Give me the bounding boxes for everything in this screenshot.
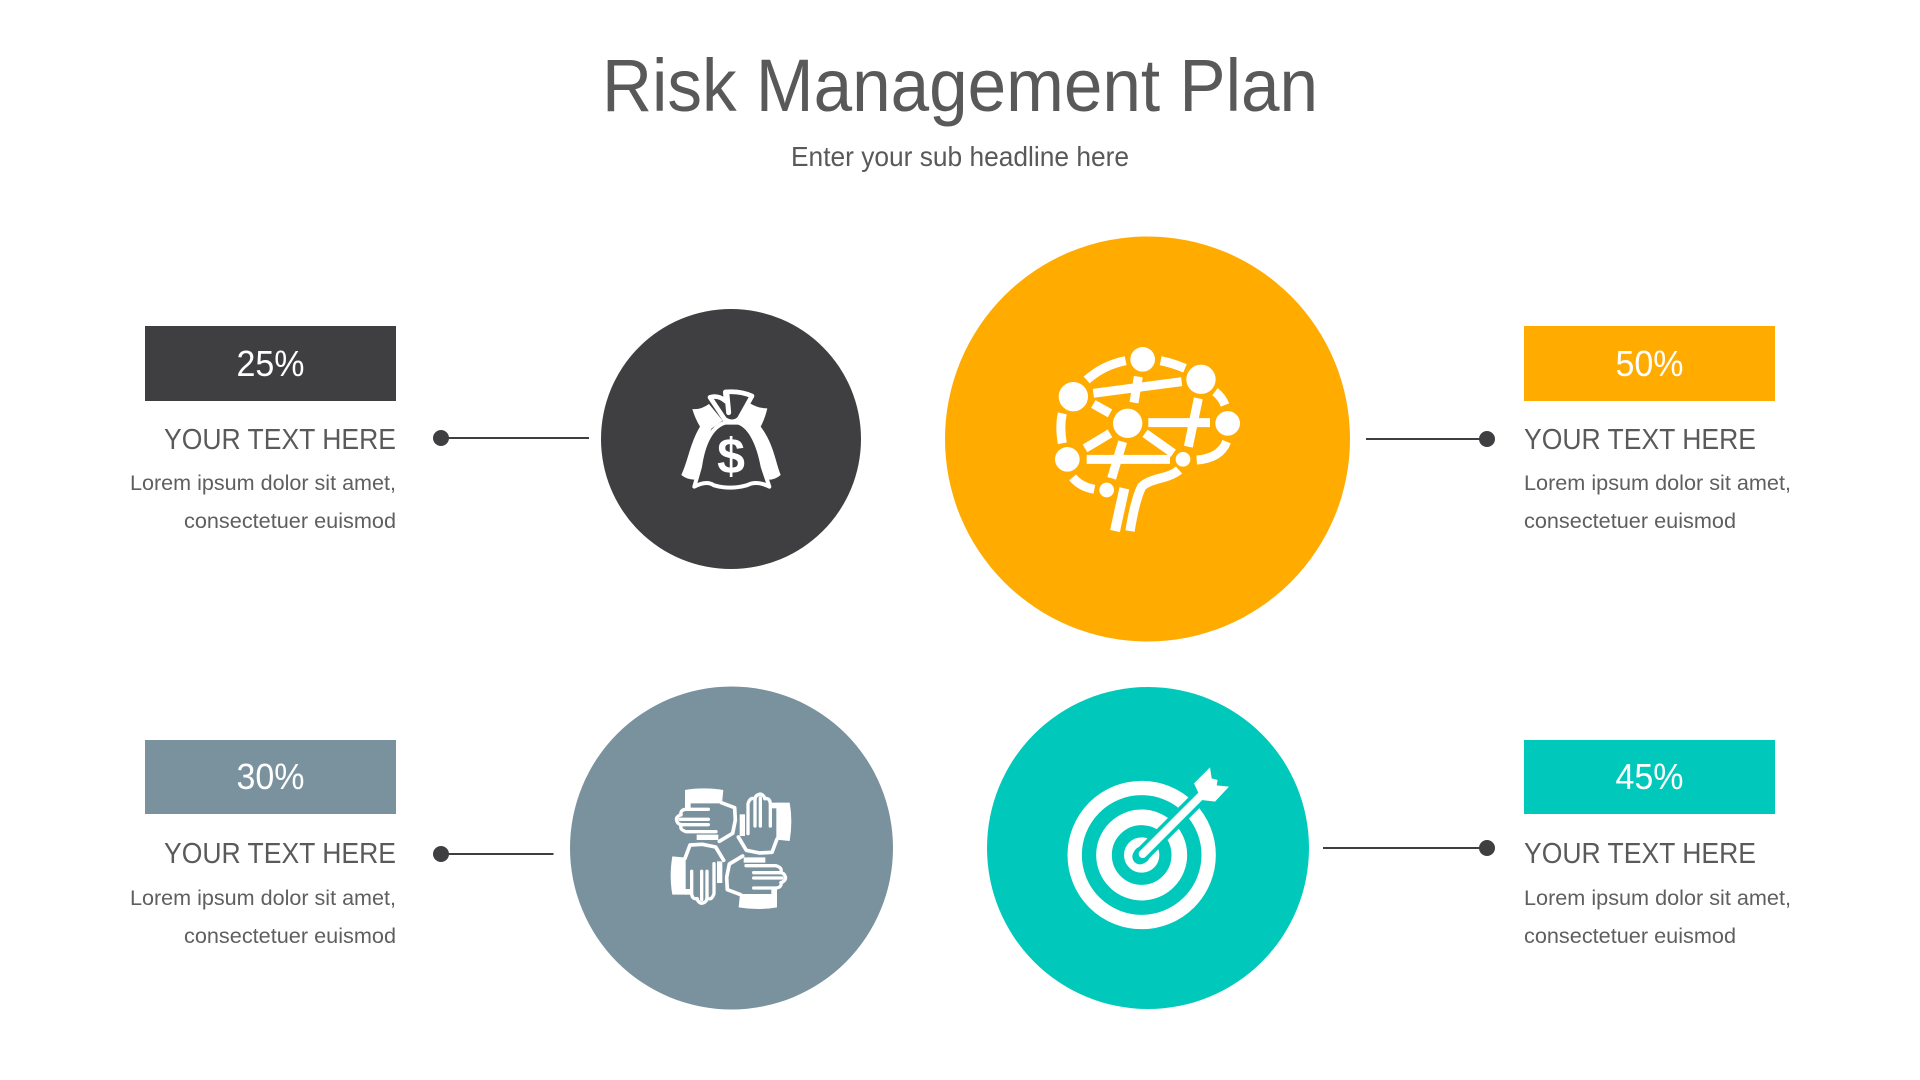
subtitle: Enter your sub headline here	[791, 141, 1129, 172]
percentage box 50%: 50%	[1616, 343, 1684, 384]
body text: consectetuer euismod	[1524, 925, 1736, 948]
body text: Lorem ipsum dolor sit amet,	[1524, 887, 1791, 910]
body text	[1524, 472, 1791, 533]
panel: 30% bottom left	[130, 740, 554, 948]
percentage box 50%	[1524, 326, 1775, 401]
body text	[1524, 887, 1791, 948]
percentage box 25%	[145, 326, 396, 401]
percentage box 30%	[145, 740, 396, 814]
circle: dark money	[601, 309, 861, 569]
circle: grey hands	[570, 686, 893, 1010]
heading: YOUR TEXT HERE	[164, 838, 396, 870]
body text: Lorem ipsum dolor sit amet,	[130, 887, 396, 910]
icon: money bags: $	[717, 428, 745, 484]
percentage box 30%: 30%	[236, 756, 304, 797]
panel: 50% top right	[1366, 326, 1791, 533]
body text: consectetuer euismod	[184, 925, 396, 948]
heading: YOUR TEXT HERE	[1524, 838, 1756, 870]
connector	[1366, 431, 1495, 447]
circle: teal target	[987, 687, 1309, 1009]
connector	[433, 430, 589, 446]
heading: YOUR TEXT HERE	[1524, 424, 1756, 456]
percentage box 45%	[1524, 740, 1775, 814]
panel: 45% bottom right	[1323, 740, 1791, 948]
icon: target with arrow	[1075, 767, 1229, 922]
icon: brain network	[1055, 347, 1240, 531]
circle: orange brain	[945, 236, 1350, 642]
body text: Lorem ipsum dolor sit amet,	[130, 472, 396, 495]
heading: YOUR TEXT HERE	[164, 424, 396, 456]
connector	[433, 846, 554, 862]
title: Risk Management Plan	[602, 44, 1318, 127]
percentage box 25%: 25%	[236, 343, 304, 384]
icon: money bags	[681, 392, 781, 488]
body text	[130, 472, 396, 533]
body text: consectetuer euismod	[1524, 510, 1736, 533]
icon: four joined hands	[671, 788, 791, 909]
connector	[1323, 840, 1495, 856]
body text	[130, 887, 396, 948]
body text: consectetuer euismod	[184, 510, 396, 533]
panel: 25% top left	[130, 326, 589, 533]
percentage box 45%: 45%	[1616, 756, 1684, 797]
body text: Lorem ipsum dolor sit amet,	[1524, 472, 1791, 495]
